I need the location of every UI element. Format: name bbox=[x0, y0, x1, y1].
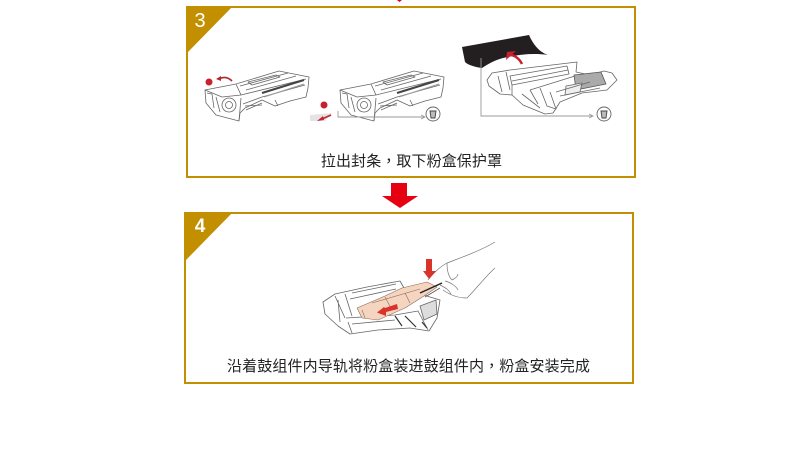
hand bbox=[428, 242, 495, 298]
step 3 caption: 拉出封条，取下粉盒保护罩 bbox=[321, 153, 502, 170]
illustration: cartridge with seal removed bbox=[340, 71, 444, 121]
arrow: step 3 to step 4 bbox=[382, 183, 418, 208]
marker 1 with curved arrow bbox=[206, 76, 232, 86]
step 3 badge bbox=[186, 6, 233, 52]
drum unit outline bbox=[323, 281, 440, 334]
step 3 number: 3 bbox=[194, 10, 206, 32]
red insertion arrow bbox=[377, 304, 398, 316]
step 4 number: 4 bbox=[195, 216, 206, 237]
previous step arrow tip bbox=[397, 0, 402, 2]
disposal line to recycling icon bbox=[338, 107, 440, 121]
red downward arrow bbox=[423, 259, 436, 279]
peach toner cartridge bbox=[357, 282, 442, 320]
step 4 badge bbox=[184, 212, 233, 260]
step 4 caption: 沿着鼓组件内导轨将粉盒装进鼓组件内，粉盒安装完成 bbox=[227, 358, 590, 375]
illustration: drum unit bbox=[487, 62, 617, 114]
panel: step 4 bbox=[184, 212, 633, 383]
marker 2 with seal strip and arrow bbox=[310, 102, 332, 121]
illustration: black protective cover with red arrow bbox=[462, 35, 548, 68]
panel: step 3 bbox=[186, 6, 635, 177]
illustration: toner cartridge with seal tab bbox=[205, 71, 309, 121]
disposal line to recycling icon bbox=[481, 58, 611, 121]
illustration: drum unit with cartridge and hand bbox=[323, 242, 495, 334]
